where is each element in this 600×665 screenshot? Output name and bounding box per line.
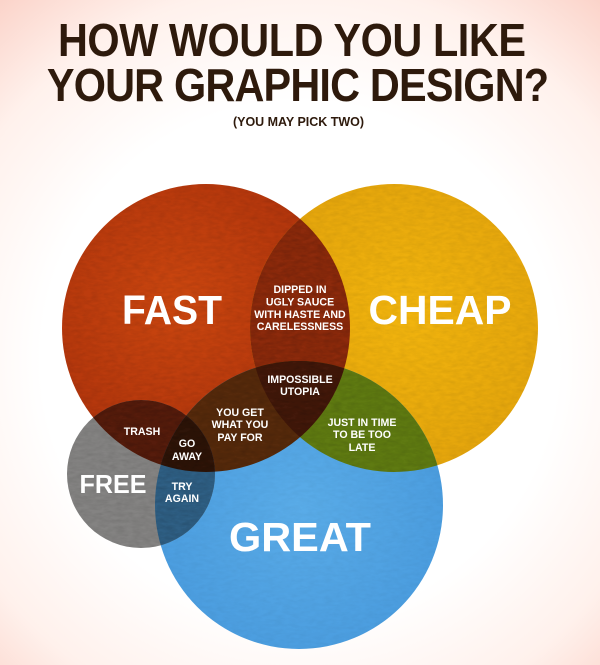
circle: great bbox=[155, 361, 443, 649]
label: just in time to be too late bbox=[328, 417, 396, 454]
title: HOW WOULD YOU LIKE bbox=[58, 15, 526, 67]
label: impossible utopia: UTOPIA bbox=[280, 386, 320, 398]
label: great: GREAT bbox=[229, 514, 371, 560]
title bbox=[47, 15, 549, 112]
label: you get what you pay for bbox=[212, 407, 268, 444]
label: go away: GO bbox=[179, 438, 195, 450]
overlap: cheap and great bbox=[256, 361, 438, 472]
label: fast and cheap: WITH HASTE AND bbox=[254, 309, 346, 321]
overlap: free and great bbox=[155, 416, 215, 546]
overlap: fast and free bbox=[93, 400, 186, 465]
circle: fast bbox=[62, 184, 350, 472]
circle: free bbox=[67, 400, 215, 548]
label: fast and cheap: CARELESSNESS bbox=[257, 321, 343, 333]
label: cheap: CHEAP bbox=[368, 287, 512, 333]
label: you get what you pay for: PAY FOR bbox=[217, 432, 263, 444]
label: just in time to be too late: LATE bbox=[349, 442, 375, 454]
label: fast: FAST bbox=[122, 287, 222, 333]
label: impossible utopia bbox=[267, 374, 333, 398]
label: you get what you pay for: WHAT YOU bbox=[212, 419, 268, 431]
label: go away bbox=[172, 438, 202, 463]
overlap: fast, free and great bbox=[160, 416, 215, 472]
label: you get what you pay for: YOU GET bbox=[216, 407, 264, 419]
overlap: fast and cheap bbox=[250, 219, 350, 368]
subtitle: (YOU MAY PICK TWO) bbox=[233, 115, 364, 129]
label: just in time to be too late: JUST IN TIME bbox=[328, 417, 396, 429]
overlap: fast and great bbox=[186, 361, 344, 472]
label: try again bbox=[165, 481, 199, 505]
label: just in time to be too late: TO BE TOO bbox=[333, 429, 391, 441]
title: YOUR GRAPHIC DESIGN? bbox=[47, 60, 549, 112]
circle: cheap bbox=[250, 184, 538, 472]
paper texture bbox=[62, 184, 349, 418]
venn diagram bbox=[60, 180, 545, 655]
label: impossible utopia: IMPOSSIBLE bbox=[267, 374, 333, 386]
label: try again: AGAIN bbox=[165, 493, 199, 505]
label: fast and cheap bbox=[254, 284, 346, 333]
label: fast and cheap: UGLY SAUCE bbox=[266, 296, 334, 308]
overlap: fast, cheap and great bbox=[256, 361, 344, 437]
label: trash: TRASH bbox=[124, 426, 160, 438]
label: try again: TRY bbox=[172, 481, 192, 493]
label: go away: AWAY bbox=[172, 451, 202, 463]
label: free: FREE bbox=[80, 469, 146, 499]
label: fast and cheap: DIPPED IN bbox=[274, 284, 326, 296]
